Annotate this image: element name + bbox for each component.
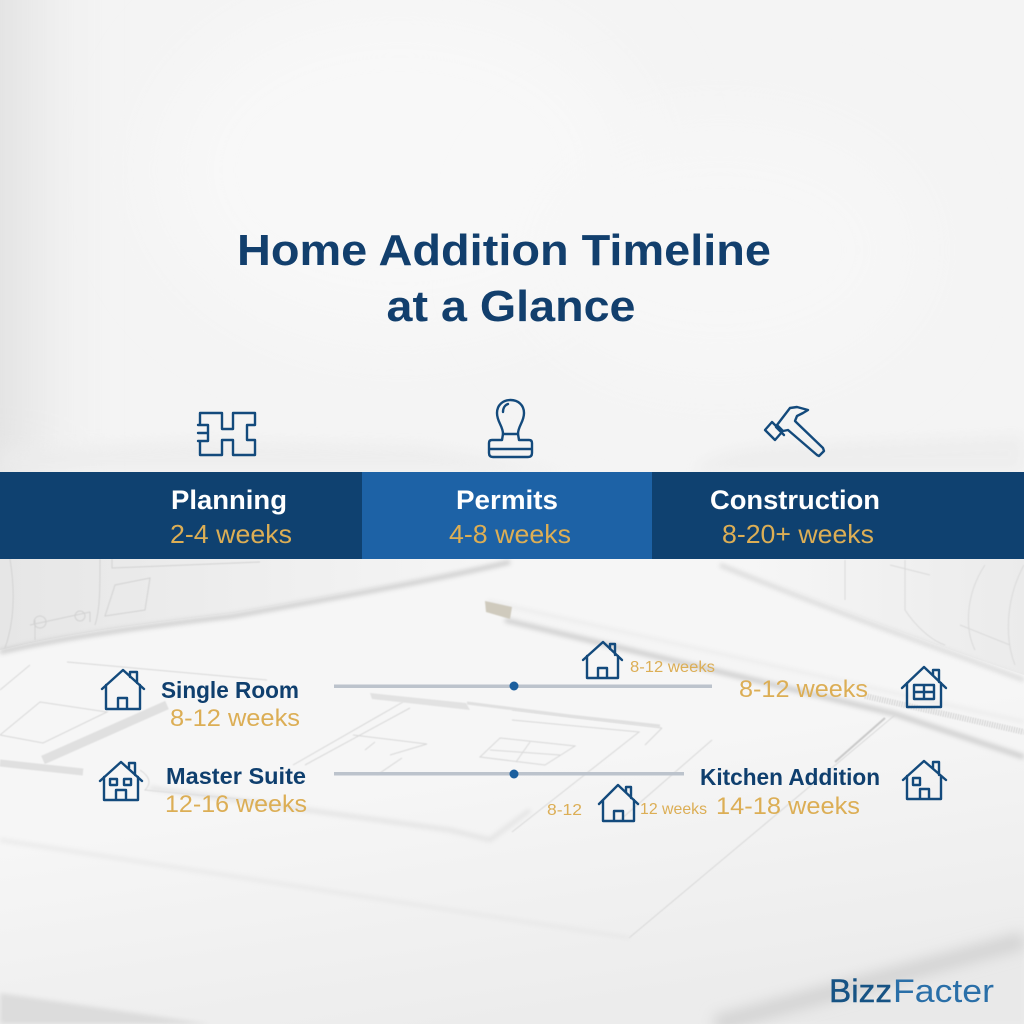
label: small lower left fragment: 8-12 [547,802,582,819]
logo: BizzFacter: Facter [893,973,994,1009]
icon: small house lower centre [599,785,638,821]
paper edge shadows [715,940,1024,1024]
icon: construction hammer [765,407,824,456]
label: master suite: 12-16 weeks [165,791,307,818]
label: kitchen addition [700,764,880,820]
timeline slider: upper [334,682,712,690]
panel: construction [652,472,1024,559]
icon: window house [902,667,946,707]
label: master suite [165,763,307,818]
panel: planning: Planning [171,485,287,515]
label: small lower right fragment: 12 weeks [640,801,707,818]
label: single room: Single Room [161,677,299,703]
icon: master suite house [100,762,142,800]
panel: permits: 4-8 weeks [449,519,571,549]
icon: single room house [102,670,144,709]
logo: BizzFacter: Bizz [829,973,892,1009]
label: kitchen addition: Kitchen Addition [700,764,880,790]
label: single room: 8-12 weeks [170,705,300,732]
label: single room [161,677,300,732]
panel: planning: 2-4 weeks [170,519,292,549]
label: upper right duration: 8-12 weeks [739,676,868,703]
icon: planning blueprint [198,413,255,455]
measuring ruler [487,600,1024,755]
title: at a Glance [386,282,636,331]
label: small upper duration: 8-12 weeks [630,659,715,676]
icon: small house upper centre [583,642,622,678]
panel: construction: 8-20+ weeks [722,519,874,549]
title: Home Addition Timeline [237,226,771,275]
label: master suite: Master Suite [166,763,306,789]
panel: permits [362,472,652,559]
timeline band [0,472,1024,559]
title [237,226,771,331]
right blueprint roll [718,559,1024,675]
floor plan lines [0,662,895,938]
icon: permit stamp [489,400,532,457]
icon: kitchen house [903,761,946,799]
panel: construction: Construction [710,485,880,515]
logo: BizzFacter [829,973,994,1009]
label: kitchen addition: 14-18 weeks [716,793,860,820]
left blueprint roll [0,559,510,650]
panel: planning [0,472,362,559]
timeline slider: lower [334,770,684,778]
panel: permits: Permits [456,485,558,515]
